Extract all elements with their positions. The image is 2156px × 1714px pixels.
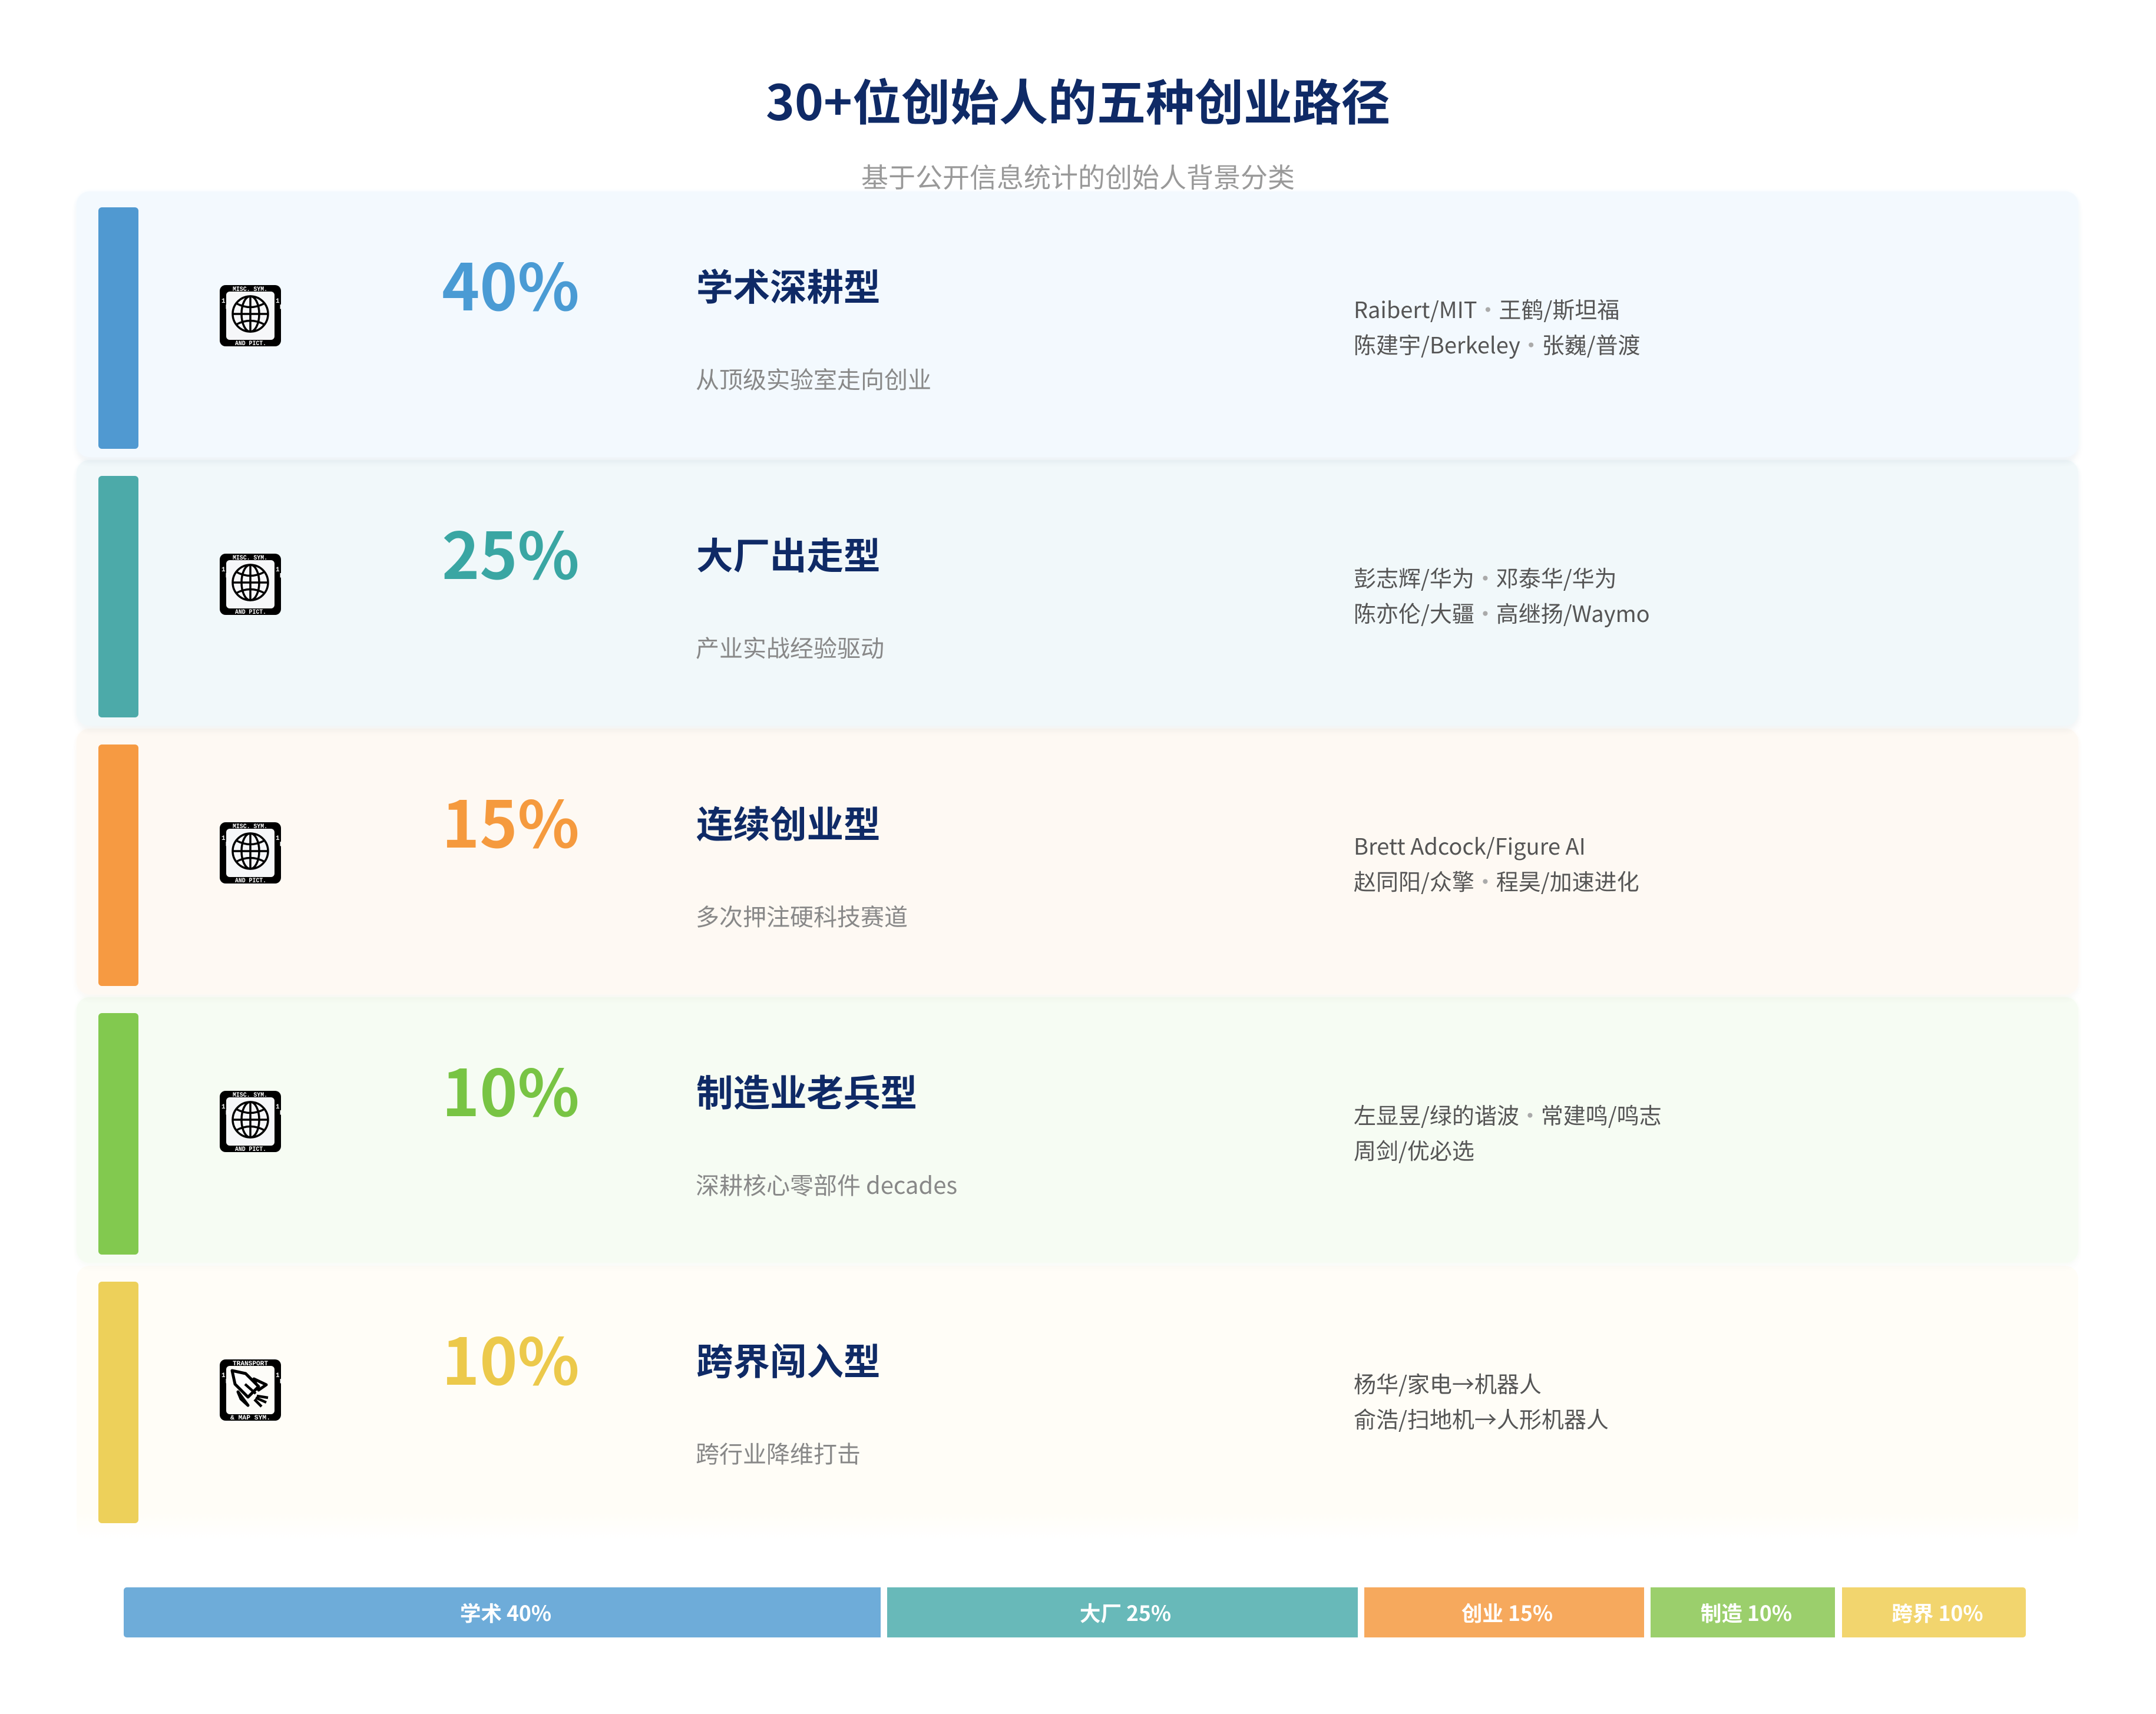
icon: globe: MISC. SYM. — [233, 1092, 267, 1099]
segment: serial 15% — [1364, 1587, 1644, 1637]
founders — [1354, 561, 1650, 628]
founders — [1354, 292, 1640, 360]
segment: serial 15%: 创业 15% — [1461, 1597, 1553, 1627]
founders — [1354, 1098, 1662, 1166]
segment: manufacturing 10%: 制造 10% — [1701, 1597, 1792, 1627]
founders: Raibert/MIT · 王鹤/斯坦福 — [1354, 292, 1619, 325]
segment: big tech 25%: 大厂 25% — [1080, 1597, 1171, 1627]
icon: rocket: TRANSPORT — [233, 1361, 268, 1368]
type heading: 跨界闯入型 — [696, 1332, 880, 1385]
founders: 陈亦伦/大疆 · 高继扬/Waymo — [1354, 596, 1650, 628]
type heading: 学术深耕型 — [696, 257, 880, 311]
segment: big tech 25% — [887, 1587, 1358, 1637]
accent bar — [98, 745, 138, 986]
description: 跨行业降维打击 — [696, 1435, 861, 1470]
founders: 杨华/家电→机器人 — [1354, 1366, 1542, 1399]
accent bar — [98, 1282, 138, 1523]
subtitle: 基于公开信息统计的创始人背景分类 — [861, 157, 1295, 196]
icon: globe: 1F500 — [221, 1104, 241, 1136]
icon: globe: MISC. SYM. — [233, 823, 267, 830]
panel: academic — [77, 191, 2078, 457]
icon: globe: 1F500 — [221, 567, 241, 598]
founders: 陈建宇/Berkeley · 张巍/普渡 — [1354, 327, 1640, 360]
description: 从顶级实验室走向创业 — [696, 361, 931, 395]
icon: globe: 1F500 — [221, 298, 241, 330]
segment: academic 40% — [124, 1587, 881, 1637]
type heading: 连续创业型 — [696, 795, 880, 848]
icon: globe: MISC. SYM. — [233, 286, 267, 293]
founders: 彭志辉/华为 · 邓泰华/华为 — [1354, 561, 1617, 593]
panel: serial — [77, 729, 2078, 994]
description: 产业实战经验驱动 — [696, 630, 884, 664]
percentage: 25% — [442, 505, 580, 598]
accent bar — [98, 476, 138, 717]
title: 30+位创始人的五种创业路径 — [766, 64, 1390, 134]
icon: globe — [220, 554, 281, 615]
icon: globe — [220, 285, 281, 346]
percentage: 15% — [442, 774, 580, 866]
description: 深耕核心零部件 decades — [696, 1167, 957, 1201]
founders — [1354, 1366, 1609, 1434]
founders: 周剑/优必选 — [1354, 1133, 1474, 1166]
icon: globe: 1F500 — [221, 835, 241, 867]
segment: cross-industry 10%: 跨界 10% — [1892, 1597, 1983, 1627]
segment: manufacturing 10% — [1651, 1587, 1835, 1637]
icon: rocket: 1F680 — [221, 1372, 241, 1404]
icon: globe — [220, 1091, 281, 1152]
founders: 赵同阳/众擎 · 程昊/加速进化 — [1354, 864, 1639, 896]
icon: globe — [220, 822, 281, 884]
description: 多次押注硬科技赛道 — [696, 898, 908, 932]
icon: rocket — [220, 1359, 281, 1421]
founders — [1354, 829, 1639, 896]
segment: academic 40%: 学术 40% — [460, 1597, 551, 1627]
type heading: 大厂出走型 — [696, 526, 880, 580]
founders: Brett Adcock/Figure AI — [1354, 829, 1586, 861]
percentage: 10% — [442, 1311, 580, 1404]
accent bar — [98, 207, 138, 449]
segment: cross-industry 10% — [1842, 1587, 2026, 1637]
percentage: 10% — [442, 1043, 580, 1135]
percentage: 40% — [442, 237, 580, 329]
founders: 左显昱/绿的谐波 · 常建鸣/鸣志 — [1354, 1098, 1662, 1130]
icon: globe: MISC. SYM. — [233, 555, 267, 562]
panel: big tech — [77, 460, 2078, 726]
panel: manufacturing — [77, 997, 2078, 1263]
type heading: 制造业老兵型 — [696, 1063, 917, 1117]
panel: cross-industry — [77, 1266, 2078, 1540]
accent bar — [98, 1013, 138, 1255]
founders: 俞浩/扫地机→人形机器人 — [1354, 1402, 1609, 1434]
